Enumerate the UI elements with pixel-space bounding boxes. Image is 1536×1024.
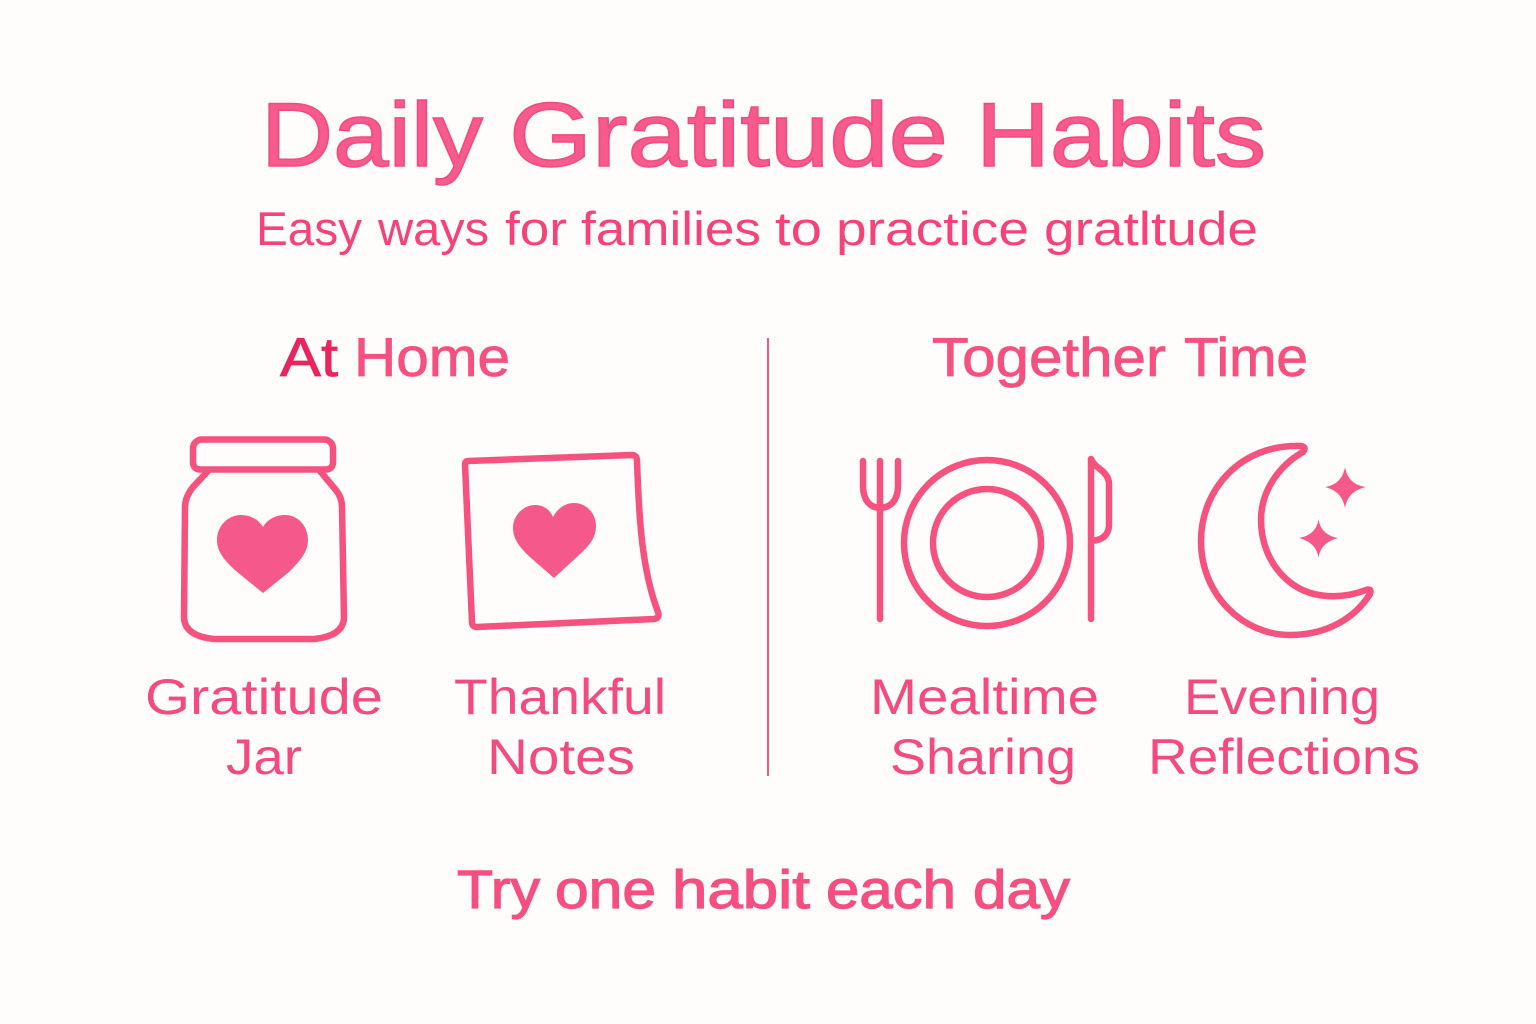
label: Mealtime Sharing <box>870 669 1099 785</box>
heading: At Home: Home <box>354 326 510 388</box>
subtitle <box>256 202 1258 255</box>
heading: Together Time: Together <box>932 326 1166 388</box>
footer call to action: day <box>973 860 1070 920</box>
label: Evening Reflections: Reflections <box>1148 729 1420 785</box>
heading: At Home: At <box>280 326 338 388</box>
icon: moon and stars <box>1201 446 1370 635</box>
label: Mealtime Sharing: Mealtime <box>870 669 1099 725</box>
label: Gratitude Jar: Gratitude <box>145 669 383 725</box>
heading: Together Time <box>932 326 1308 388</box>
title: Habits <box>976 85 1266 186</box>
subtitle: gratltude <box>1044 202 1258 255</box>
title: Gratitude <box>509 85 948 186</box>
subtitle: ways <box>377 202 489 255</box>
footer call to action: habit <box>672 860 810 920</box>
footer call to action <box>457 860 1070 920</box>
subtitle: families <box>581 202 761 255</box>
label: Thankful Notes: Thankful <box>454 669 666 725</box>
icon: gratitude jar <box>184 440 344 639</box>
subtitle: practice <box>836 202 1029 255</box>
label: Gratitude Jar <box>145 669 383 785</box>
heading: At Home <box>280 326 510 388</box>
center divider <box>767 338 769 776</box>
subtitle: Easy <box>256 202 362 255</box>
label: Gratitude Jar: Jar <box>226 729 302 785</box>
footer call to action: one <box>555 860 656 920</box>
footer call to action: each <box>826 860 956 920</box>
label: Evening Reflections <box>1148 669 1420 785</box>
subtitle: for <box>505 202 567 255</box>
label: Evening Reflections: Evening <box>1184 669 1380 725</box>
label: Mealtime Sharing: Sharing <box>890 729 1076 785</box>
label: Thankful Notes: Notes <box>487 729 635 785</box>
icon: thankful note <box>465 455 658 627</box>
heading: Together Time: Time <box>1184 326 1308 388</box>
footer call to action: Try <box>457 860 540 920</box>
icon: fork, plate and knife <box>863 459 1109 626</box>
title <box>261 85 1266 186</box>
title: Daily <box>261 85 484 186</box>
subtitle: to <box>775 202 822 255</box>
label: Thankful Notes <box>454 669 666 785</box>
